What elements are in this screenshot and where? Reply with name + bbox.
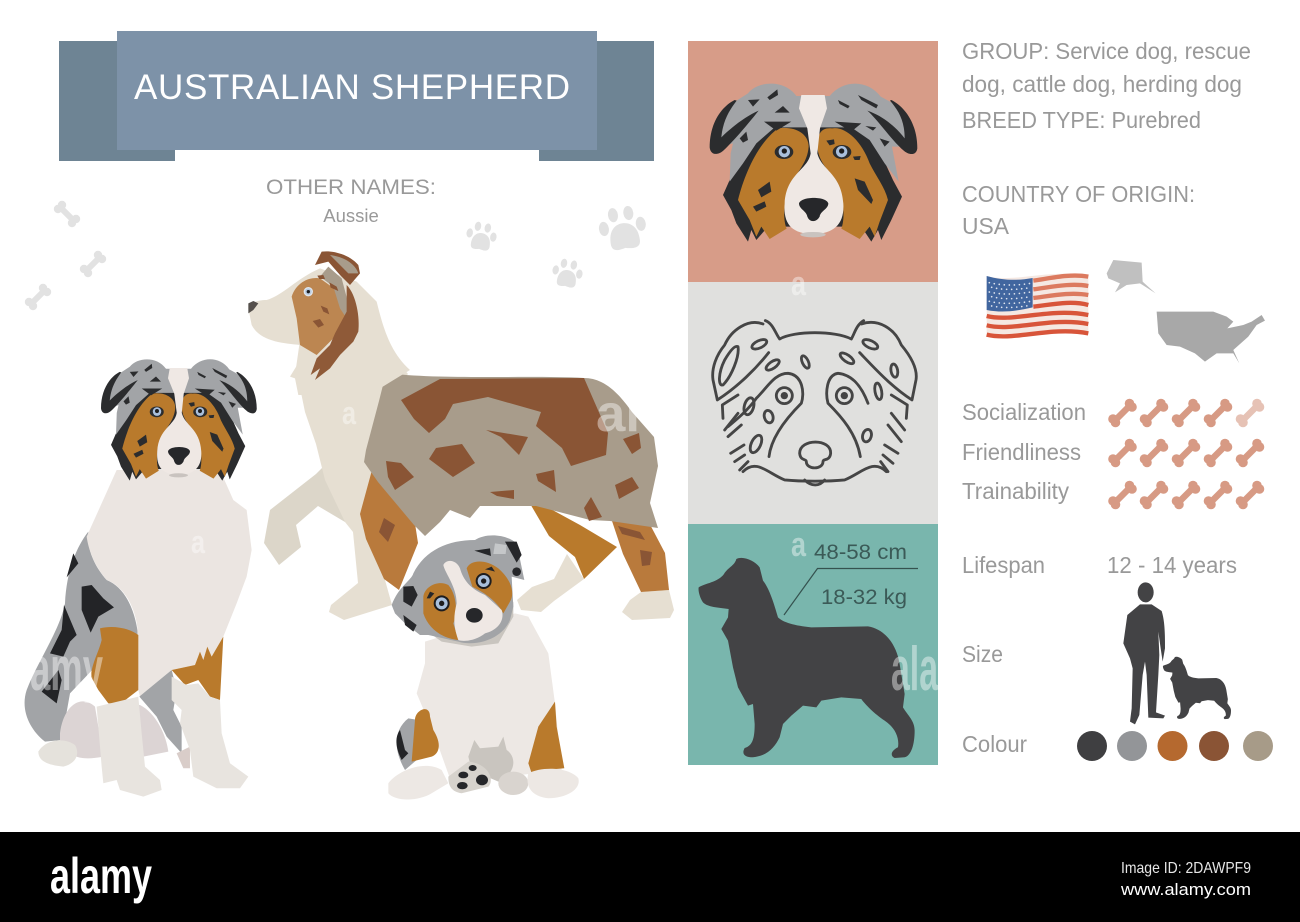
- watermark fragments: a: [791, 526, 807, 564]
- footer bar: [0, 832, 1300, 922]
- breed facts: COUNTRY OF ORIGIN:: [962, 181, 1195, 207]
- icon: human and dog size comparison: [1123, 582, 1231, 724]
- dog: sitting blue merle: [25, 359, 257, 797]
- decorative bones and paws: [25, 201, 649, 310]
- breed facts: BREED TYPE: Purebred: [962, 107, 1201, 133]
- colour swatches: [1077, 731, 1273, 761]
- icon: US flag: [987, 274, 1088, 337]
- lifespan: 12 - 14 years: [1107, 552, 1237, 578]
- watermark fragments: al: [596, 385, 640, 443]
- watermark fragments: a: [342, 395, 356, 431]
- rating labels: Socialization: [962, 399, 1086, 425]
- rating labels: Trainability: [962, 478, 1069, 504]
- breed facts: USA: [962, 213, 1010, 239]
- lifespan: Lifespan: [962, 552, 1045, 578]
- lifespan: [962, 552, 1237, 578]
- breed facts: [962, 38, 1251, 239]
- watermark fragments: a: [191, 524, 205, 560]
- watermark fragments: a: [791, 265, 807, 303]
- dog: standing red merle: [248, 251, 674, 620]
- rating: friendliness bones: [1108, 439, 1264, 467]
- breed facts: dog, cattle dog, herding dog: [962, 71, 1242, 97]
- rating labels: [962, 399, 1086, 504]
- dog: puppy: [388, 535, 579, 800]
- website: www.alamy.com: [1120, 880, 1251, 899]
- rating: socialization bones: [1108, 399, 1264, 427]
- image id: Image ID: 2DAWPF9: [1121, 860, 1251, 877]
- size label: Size: [962, 641, 1003, 667]
- breed facts: GROUP: Service dog, rescue: [962, 38, 1251, 64]
- colour label: Colour: [962, 731, 1027, 757]
- height label: 48-58 cm: [814, 541, 907, 564]
- title: AUSTRALIAN SHEPHERD: [134, 68, 570, 107]
- panel: size silhouette: [688, 524, 938, 765]
- weight label: 18-32 kg: [821, 586, 907, 609]
- other names: Aussie: [323, 205, 379, 226]
- rating: trainability bones: [1108, 481, 1264, 509]
- panel: line-art head: [688, 282, 938, 524]
- icon: USA map: [1107, 260, 1265, 363]
- watermark fragments: [30, 265, 938, 704]
- title banner: [59, 31, 654, 161]
- watermark fragments: amy: [30, 635, 103, 704]
- other names: [266, 175, 436, 226]
- rating labels: Friendliness: [962, 439, 1081, 465]
- panel: head portrait: [688, 41, 938, 282]
- other names: OTHER NAMES:: [266, 175, 436, 199]
- footer logo: alamy: [50, 848, 152, 904]
- watermark fragments: ala: [891, 635, 938, 704]
